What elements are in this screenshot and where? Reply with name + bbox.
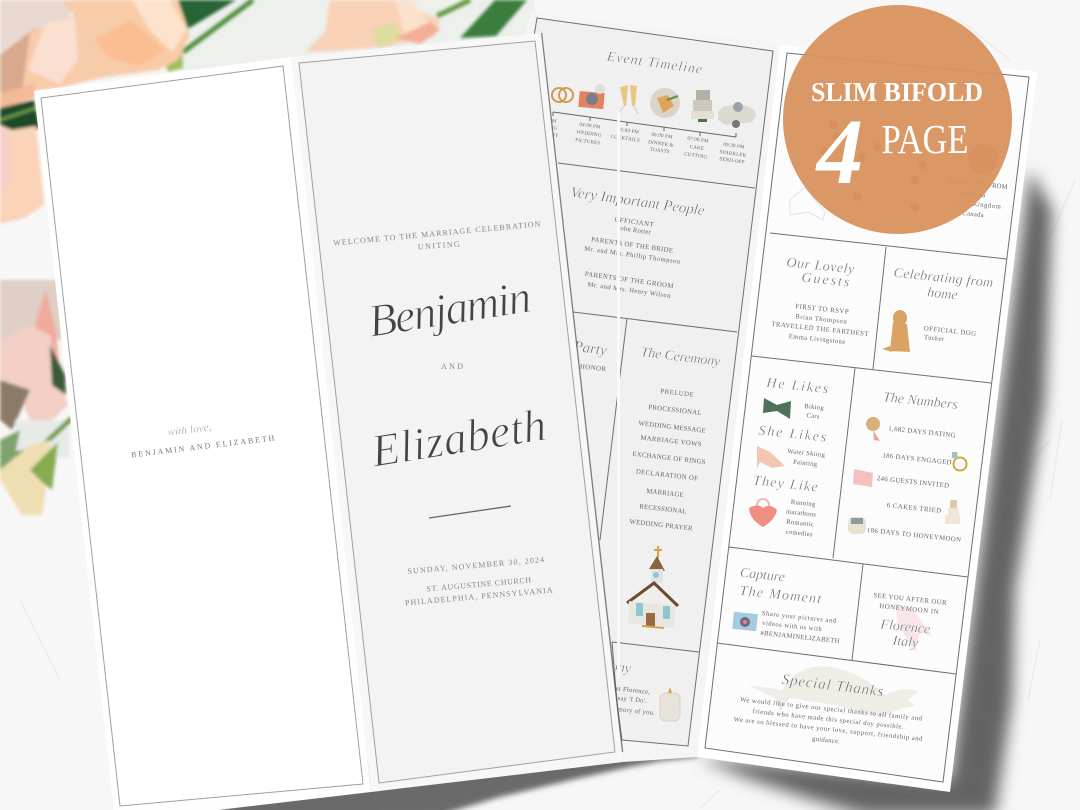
sheet: front cover <box>34 33 623 810</box>
timeline label: dinner <box>647 132 675 156</box>
people list: Mr. and Mrs. Henry Wilson <box>587 281 672 300</box>
timeline label: cocktails <box>610 127 641 144</box>
icon: champagne flutes <box>620 85 638 114</box>
panel: he likes she likes they like <box>749 376 830 538</box>
heading: capture the moment: Capture <box>739 566 786 585</box>
she likes list: Water Skiing <box>787 448 826 459</box>
badge numeral: 4: 4 <box>815 101 863 204</box>
guest notes: TRAVELLED THE FARTHEST <box>771 321 870 338</box>
timeline label: cocktails: COCKTAILS <box>610 135 640 144</box>
he likes list: Cars <box>806 412 820 421</box>
icon: candle <box>660 687 680 721</box>
badge text: page: PAGE <box>882 117 968 163</box>
timeline label: sparkler <box>718 142 748 166</box>
icon: envelope <box>853 469 873 487</box>
honeymoon note: HONEYMOON IN <box>879 603 939 616</box>
icon: church <box>627 546 678 628</box>
they like list: comedies <box>785 529 813 538</box>
icon: tiered cake <box>945 500 960 524</box>
timeline label: cake: CUTTING <box>684 152 708 161</box>
timeline label: cake: CAKE <box>689 145 704 152</box>
icon: dinner plate <box>650 88 680 118</box>
ceremony order list: WEDDING PRAYER <box>629 518 693 533</box>
script name: elizabeth: Elizabeth <box>367 399 549 477</box>
icon: high heel <box>757 446 785 468</box>
panel: our lovely guests <box>771 256 870 346</box>
script: with love: with love, <box>167 421 212 439</box>
ceremony order list: PRELUDE <box>660 388 695 399</box>
they like list: Romantic <box>786 519 814 528</box>
flowers: left pink blooms <box>0 280 72 515</box>
guest notes: Brian Thompson <box>795 313 848 326</box>
timeline label: dinner: 06:00 PM <box>651 133 673 141</box>
heading: very important people: Very Important People <box>570 185 706 219</box>
unity text <box>558 679 656 717</box>
panel: wedding party <box>517 331 608 373</box>
panel: celebrating from home: home <box>927 285 958 304</box>
she likes list: Painting <box>793 459 818 468</box>
hashtag note: #BENJAMINELIZABETH <box>760 630 840 645</box>
icon: bouquet <box>866 417 880 441</box>
hashtag note: Share your pictures and <box>761 610 837 625</box>
icon: vintage car <box>718 102 756 128</box>
panel: unity ceremony: Unity Ceremony <box>539 652 632 677</box>
ceremony order list: MARRIAGE VOWS <box>640 435 702 448</box>
panel: capture the moment <box>732 566 840 645</box>
thank you message: guidance. <box>812 736 841 745</box>
ceremony order list: EXCHANGE OF RINGS <box>632 451 706 466</box>
panel: the numbers: 186 DAYS ENGAGED <box>882 452 952 467</box>
icon: camera <box>578 84 605 109</box>
panel: event timeline <box>529 49 756 166</box>
timeline label: ceremony <box>529 116 561 139</box>
sheet: right panels <box>697 45 1037 792</box>
thank you message: friends who have made this special day possible. <box>752 708 904 731</box>
date and venue: SUNDAY, NOVEMBER 30, 2024 <box>407 555 544 576</box>
timeline label: dinner: TOASTS <box>650 148 670 155</box>
guest origin list: AND AGAIN FROM <box>948 178 1008 191</box>
panel: unity ceremony <box>539 652 680 721</box>
people list: PARENTS OF THE GROOM <box>584 271 674 290</box>
panel: capture the moment: The Moment <box>739 584 823 607</box>
panel: left cover <box>34 57 371 810</box>
welcome lines: UNITING <box>418 240 460 251</box>
timeline label: dinner: DINNER & <box>648 140 674 149</box>
panel: right cover <box>291 33 623 792</box>
guest origin list <box>948 178 1008 219</box>
date and venue <box>405 555 553 607</box>
panel: the numbers: 186 DAYS TO HONEYMOON <box>867 527 962 544</box>
cast shadow: right sheet <box>697 170 1052 810</box>
he likes list: Biking <box>804 403 825 412</box>
ribbon banner <box>748 666 918 718</box>
timeline label: sparkler: 09:30 PM <box>723 143 745 151</box>
icon: italy map <box>895 603 932 652</box>
heading: our lovely guests: Our Lovely <box>786 256 856 278</box>
front sheet shadow edge <box>541 33 622 752</box>
heading: they like: They Like <box>752 474 818 495</box>
icon: honeymoon car <box>848 517 866 534</box>
script: florence italy: Florence <box>879 617 931 638</box>
unity text: In memory of dearest Florence, <box>558 679 651 696</box>
icon: wedding rings <box>552 88 573 102</box>
icon: engagement ring <box>952 452 966 470</box>
map pins <box>820 120 928 212</box>
signature names: BENJAMIN AND ELIZABETH <box>131 433 275 460</box>
timeline label: ceremony: WEDDING <box>532 123 558 132</box>
script: florence italy: Italy <box>891 634 920 651</box>
timeline label: pictures: 04:00 PM <box>579 123 601 131</box>
panel: honeymoon <box>873 592 947 652</box>
welcome lines: WELCOME TO THE MARRIAGE CELEBRATION <box>333 219 541 248</box>
ceremony order list: DECLARATION OF <box>635 468 699 483</box>
guest origin list: United Kingdom <box>949 198 1002 211</box>
flowers: top left bouquet <box>0 0 253 224</box>
timeline label: sparkler: SPARKLER <box>719 150 747 159</box>
panel: very important people <box>570 185 706 300</box>
people list <box>584 216 681 300</box>
unity text: in loving memory of you. <box>580 702 656 717</box>
timeline label: pictures <box>575 122 603 147</box>
people list: PARENTS OF THE BRIDE <box>591 236 674 255</box>
hashtag note <box>760 610 840 645</box>
thank you message: We would like to give our special thanks to all family and <box>740 696 923 723</box>
ceremony order list: WEDDING MESSAGE <box>638 420 706 435</box>
heading: the numbers: The Numbers <box>882 390 959 413</box>
guest notes: Emma Livingstone <box>788 333 846 346</box>
timeline label: ceremony: 02:00 PM <box>535 117 557 125</box>
word: and: AND <box>441 362 463 371</box>
heading: she likes: She Likes <box>758 424 828 446</box>
ceremony order list: MARRIAGE <box>646 488 684 499</box>
timeline label: pictures: PICTURES <box>575 138 601 147</box>
guest notes <box>771 303 870 346</box>
panel: the numbers: 1,682 DAYS DATING <box>888 425 956 440</box>
timeline label: cake <box>684 136 710 161</box>
date and venue: PHILADELPHIA, PENNSYLVANIA <box>405 586 553 607</box>
timeline label: ceremony: CEREMONY <box>529 130 559 139</box>
fold strip: white crease <box>617 113 620 678</box>
panel: the numbers: 6 CAKES TRIED <box>886 502 942 515</box>
honeymoon note <box>873 592 947 616</box>
hashtag note: videos with us with <box>762 620 823 633</box>
they like list: marathons <box>786 508 817 519</box>
people list: Mr. and Mrs. Phillip Thompson <box>584 245 681 266</box>
icon: globe <box>968 144 998 174</box>
honeymoon note: SEE YOU AFTER OUR <box>873 592 947 607</box>
script: florence italy <box>879 617 931 651</box>
badge: slim bifold 4 page <box>783 5 1012 234</box>
flowers: top centre stems <box>305 0 527 52</box>
timeline label: sparkler: SEND-OFF <box>719 157 745 166</box>
timeline label: pictures: WEDDING <box>576 130 602 139</box>
dog note: Tucker <box>924 334 945 343</box>
guest origin list: Canada <box>962 210 984 219</box>
timeline label: cake: 07:00 PM <box>687 137 709 145</box>
ceremony order list <box>629 388 706 533</box>
panel: the ceremony <box>627 345 722 628</box>
panel: wedding party: MAID OF HONOR <box>546 360 607 373</box>
they like list <box>785 499 817 538</box>
icon: wedding cake <box>691 90 714 122</box>
panel: wedding party: Wedding Party <box>517 331 608 359</box>
timeline axis <box>553 112 736 137</box>
timeline label: cocktails: 05:00 PM <box>617 128 640 136</box>
panel: special thanks <box>733 666 923 745</box>
script name: benjamin: Benjamin <box>365 271 535 347</box>
ceremony order list: RECESSIONAL <box>639 503 687 516</box>
icon: bow tie <box>763 398 791 419</box>
date and venue: ST. AUGUSTINE CHURCH <box>426 575 532 594</box>
heading: the ceremony: The Ceremony <box>640 345 722 370</box>
cast shadow: front sheet <box>185 745 700 810</box>
she likes list <box>787 448 826 468</box>
guest origin list: Australia <box>958 190 986 199</box>
icon: golden retriever <box>882 310 910 352</box>
they like list: Running <box>790 499 816 508</box>
panel: guest map <box>790 120 1008 220</box>
guest notes: FIRST TO RSVP <box>795 303 849 316</box>
icon: blue camera <box>732 612 758 631</box>
people list: OFFICIANT <box>614 216 655 229</box>
heading: special thanks: Special Thanks <box>781 672 884 700</box>
panel: the numbers <box>848 390 966 544</box>
panel: celebrating from home <box>882 266 994 352</box>
dog note: OFFICIAL DOG <box>923 325 977 338</box>
panel: our lovely guests: Guests <box>801 271 851 291</box>
sheet: middle panels <box>517 12 782 762</box>
panel: celebrating from home: Celebrating from <box>893 266 994 291</box>
panel: the numbers: 246 GUESTS INVITED <box>876 475 950 490</box>
thank you message <box>733 696 923 745</box>
he likes list <box>804 403 825 421</box>
ceremony order list: PROCESSIONAL <box>648 404 702 417</box>
heading: event timeline: Event Timeline <box>605 49 703 78</box>
icon: heart lock <box>749 499 777 527</box>
divider line <box>429 506 511 518</box>
people list: John Rotter <box>617 225 652 236</box>
heading: he likes: He Likes <box>765 376 830 397</box>
icon: alaska outline <box>790 187 825 220</box>
badge text: slim bifold: SLIM BIFOLD <box>811 77 983 107</box>
unity text: as we say 'I Do'. <box>599 693 648 705</box>
thank you message: We are so blessed to have your love, support, friendship and <box>733 716 923 743</box>
